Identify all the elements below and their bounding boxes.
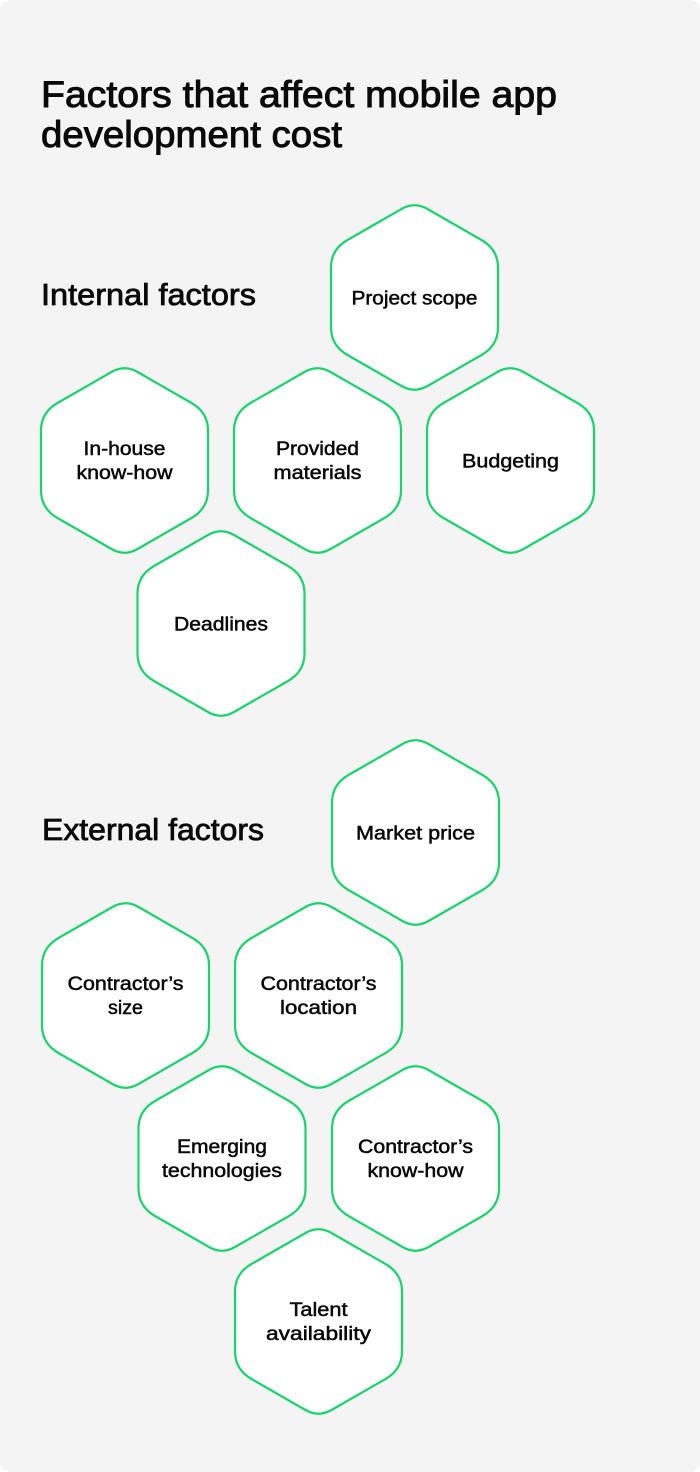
hexagon: contractor's size: Contractor’s [68, 974, 184, 995]
hexagon: budgeting [427, 368, 594, 553]
hexagon: project scope: Project scope [352, 288, 478, 310]
hexagon: contractor's size: size [108, 998, 143, 1019]
title [41, 74, 557, 155]
hexagon: in-house know-how [41, 368, 208, 553]
hexagon: contractor's know-how: Contractor’s [358, 1137, 473, 1158]
hexagon: emerging technologies: Emerging [177, 1137, 267, 1158]
hexagon: talent availability [235, 1229, 402, 1414]
hexagon: in-house know-how: In-house [84, 439, 165, 460]
title: development cost [41, 114, 343, 155]
heading: internal factors: Internal factors [41, 277, 256, 312]
hexagon: budgeting: Budgeting [462, 452, 559, 472]
panel: external factors [42, 740, 499, 1414]
hexagon: contractor's location: location [280, 998, 357, 1019]
hexagon: contractor's know-how: know-how [368, 1161, 464, 1182]
hexagon: talent availability: Talent [290, 1300, 348, 1321]
hexagon: contractor's know-how [332, 1066, 499, 1251]
hexagon: market price: Market price [356, 824, 475, 844]
hexagon: provided materials [234, 368, 401, 553]
hexagon: in-house know-how: know-how [76, 463, 173, 484]
hexagon: emerging technologies [138, 1066, 306, 1251]
hexagon: deadlines [138, 531, 304, 716]
title: Factors that affect mobile app [41, 74, 557, 115]
hexagon: provided materials: materials [274, 463, 362, 484]
hexagon: talent availability: availability [266, 1324, 372, 1345]
hexagon: market price [332, 740, 499, 925]
hexagon: contractor's location: Contractor’s [260, 974, 376, 995]
hexagon: project scope [331, 205, 498, 390]
panel: internal factors [41, 205, 594, 716]
hexagon: emerging technologies: technologies [162, 1161, 282, 1182]
hexagon: provided materials: Provided [276, 439, 359, 460]
hexagon: deadlines: Deadlines [174, 614, 268, 636]
hexagon: contractor's size [42, 903, 209, 1088]
heading: external factors: External factors [42, 812, 264, 847]
hexagon: contractor's location [235, 903, 402, 1088]
